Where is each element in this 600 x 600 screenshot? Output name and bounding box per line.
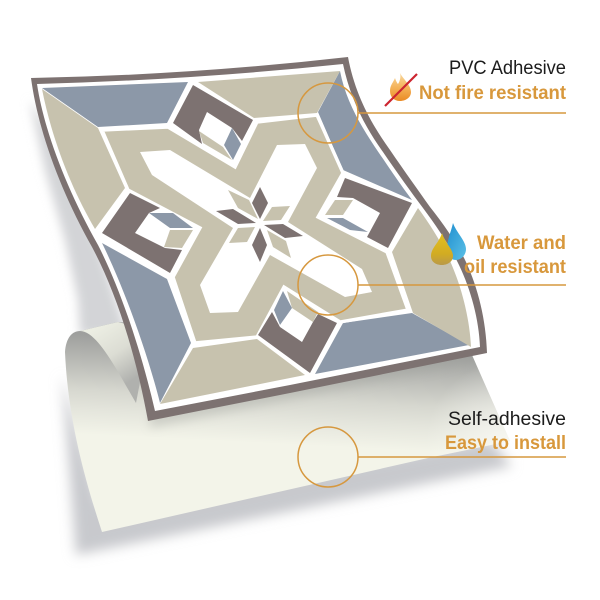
paper right side highlight xyxy=(420,355,510,458)
callout: self-adhesive xyxy=(298,409,566,487)
corner: blue bottom-right xyxy=(315,313,469,374)
callout: self-adhesive: Self-adhesive xyxy=(448,409,566,430)
cube: left xyxy=(102,193,193,273)
white cross xyxy=(140,144,372,313)
callout: water and oil resistant: oil resistant xyxy=(464,257,567,278)
icon: crossed out flame xyxy=(385,73,417,106)
tile brown border xyxy=(31,57,487,421)
callout: self-adhesive: Easy to install xyxy=(445,433,566,454)
icon: water drop xyxy=(447,223,466,260)
adhesive backing paper xyxy=(65,322,510,532)
callout: water and oil resistant xyxy=(298,223,567,315)
panel: beige right xyxy=(392,208,471,347)
tile white layer xyxy=(37,64,480,411)
callout: PVC adhesive: Not fire resistant xyxy=(419,83,567,104)
tile shadow on paper xyxy=(148,370,404,429)
callout: water and oil resistant: Water and xyxy=(477,233,566,254)
center star xyxy=(216,187,303,262)
corner: blue top-right xyxy=(318,71,412,200)
cube: bottom xyxy=(258,291,337,373)
paper curl xyxy=(80,322,150,403)
callout: PVC adhesive xyxy=(298,58,567,143)
shadow: tile on background xyxy=(30,100,128,335)
callout: PVC adhesive: PVC Adhesive xyxy=(449,58,566,79)
star band xyxy=(102,115,408,343)
panel: beige top xyxy=(198,71,340,118)
corner: blue bottom-left xyxy=(102,243,191,403)
tile xyxy=(31,57,487,421)
corner: blue top-left xyxy=(42,82,188,127)
shadow: paper on background xyxy=(62,375,512,555)
icon: oil drop xyxy=(431,233,453,265)
cube: right xyxy=(325,178,412,248)
panel: beige left xyxy=(42,89,125,229)
cube: top xyxy=(173,85,253,160)
panel: beige bottom xyxy=(160,339,305,404)
